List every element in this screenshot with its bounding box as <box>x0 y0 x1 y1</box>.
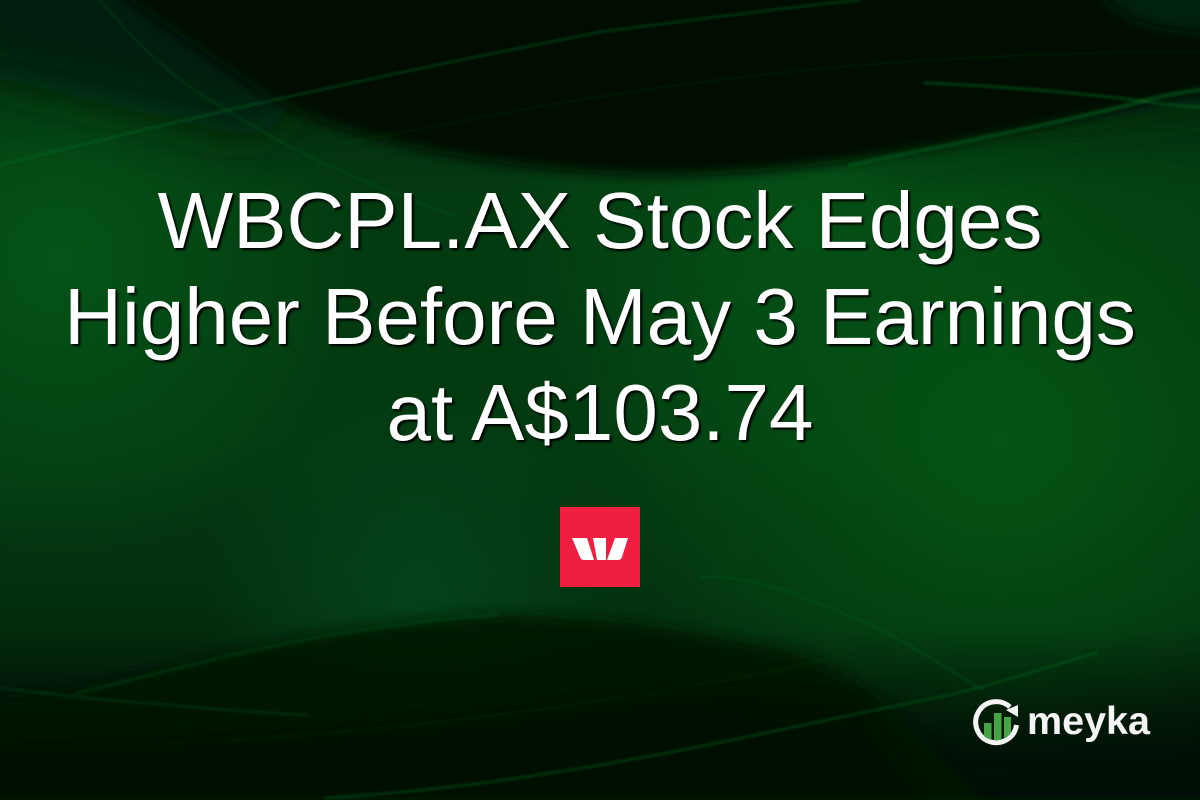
title: Higher Before May 3 Earnings <box>64 272 1136 361</box>
icon: meyka ring with bars <box>976 702 1018 743</box>
wordmark: meyka <box>1027 700 1150 743</box>
title: WBCPL.AX Stock Edges <box>158 176 1042 265</box>
title: at A$103.74 <box>386 368 814 457</box>
icon: Westpac logo <box>560 507 640 587</box>
brand: meyka logo <box>973 699 1150 746</box>
title <box>64 176 1136 457</box>
